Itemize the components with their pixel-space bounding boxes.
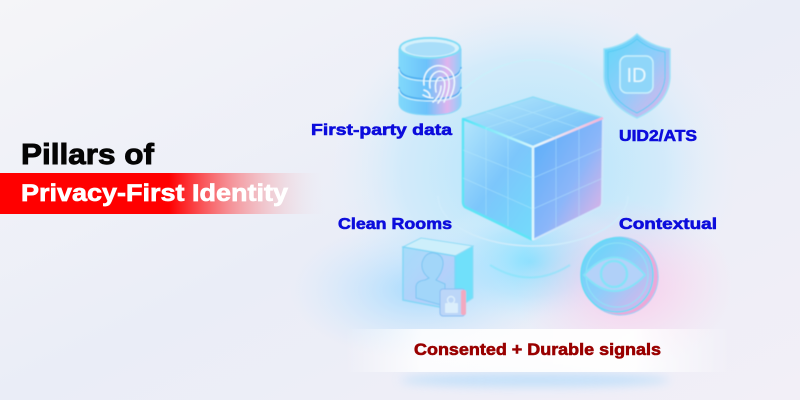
title: Pillars of: Pillars of bbox=[21, 139, 154, 171]
footer band bbox=[345, 329, 730, 372]
footer text: Consented + Durable signals bbox=[414, 341, 661, 359]
fingerprint bbox=[423, 66, 454, 103]
label: Contextual: Contextual bbox=[619, 216, 717, 233]
title: Privacy-First Identity: Privacy-First Identity bbox=[21, 180, 288, 207]
background glow bbox=[290, 0, 738, 370]
icon: database with fingerprint bbox=[399, 38, 461, 115]
icon: eye coin bbox=[573, 228, 667, 324]
icon: clean room box bbox=[403, 238, 473, 316]
title ribbon bbox=[0, 173, 325, 214]
shield label: ID bbox=[626, 65, 646, 87]
icon: central cube bbox=[463, 97, 603, 240]
cube grid lines bbox=[463, 105, 603, 228]
halo rings bbox=[438, 60, 628, 278]
icon: ID shield bbox=[604, 34, 670, 118]
label: UID2/ATS: UID2/ATS bbox=[619, 128, 697, 145]
label: Clean Rooms: Clean Rooms bbox=[338, 216, 452, 233]
footer shadow bbox=[400, 373, 670, 387]
label: First-party data: First-party data bbox=[311, 122, 452, 139]
